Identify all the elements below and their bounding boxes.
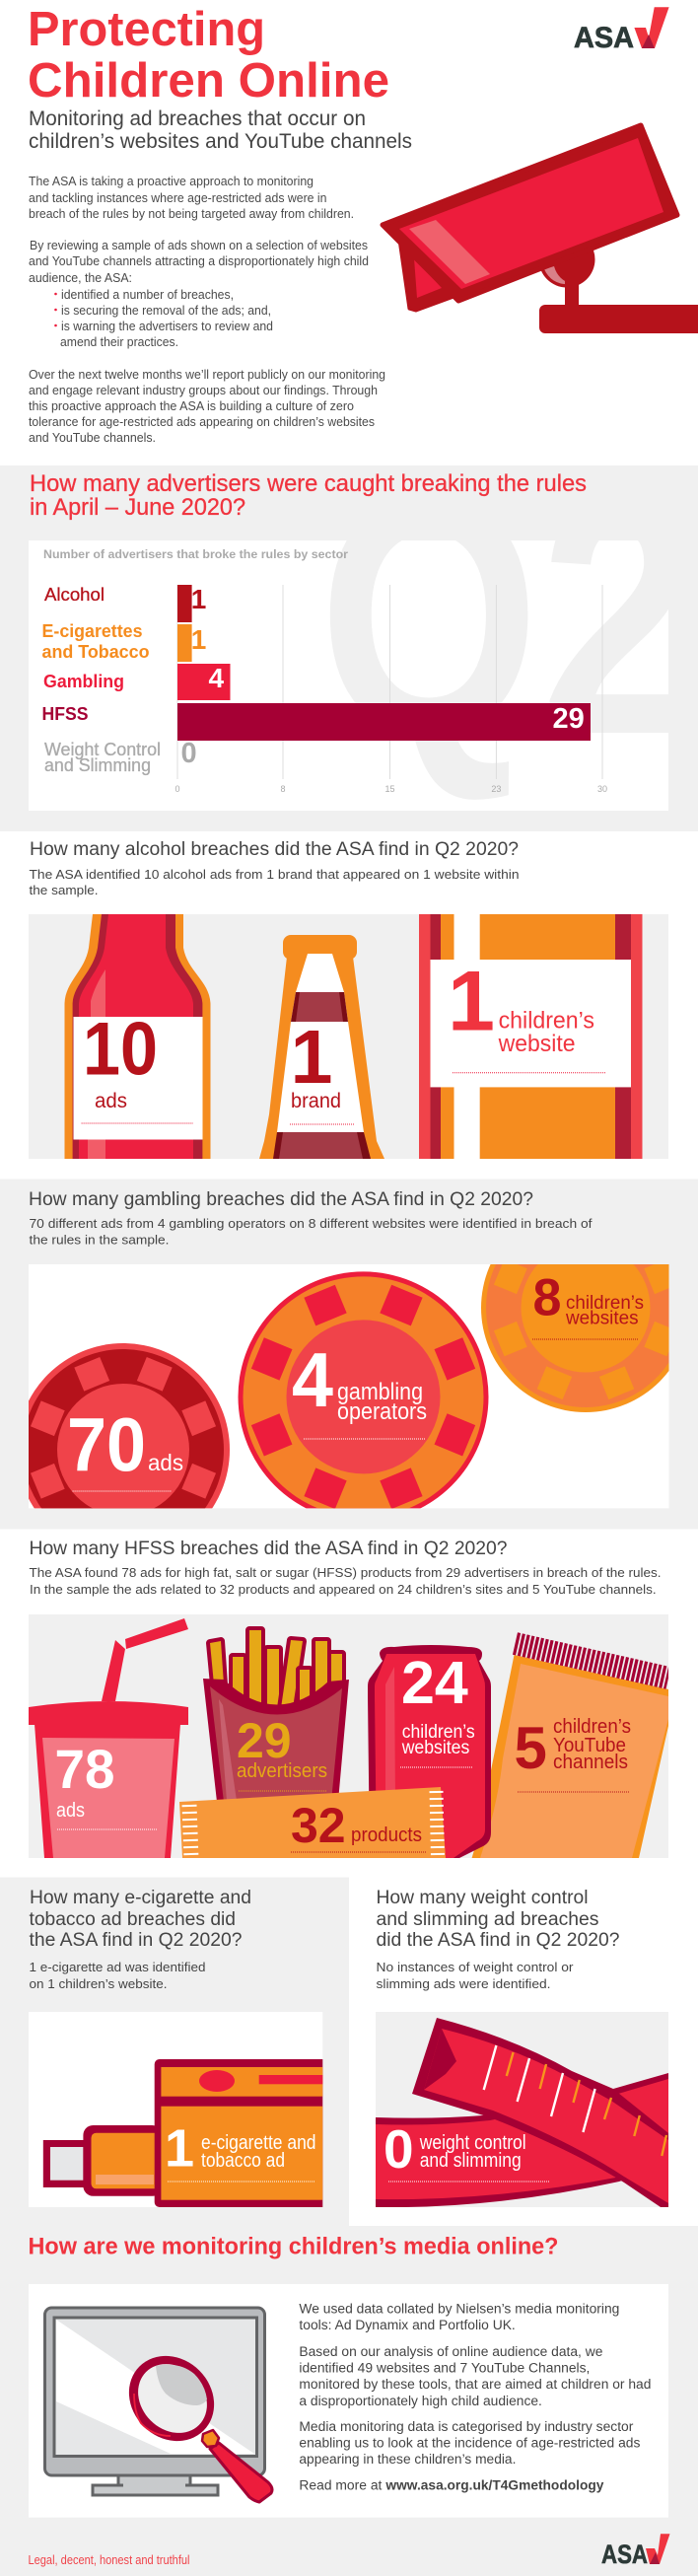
intro text: audience, the ASA: xyxy=(29,270,132,285)
heading: weight control: How many weight control xyxy=(377,1888,588,1908)
bar: gambling: 4 xyxy=(209,663,225,693)
text: methodology: appearing in these children’s media. xyxy=(299,2452,516,2467)
bar: HFSS: 29 xyxy=(552,703,585,735)
text: methodology: tools: Ad Dynamix and Portfolio UK. xyxy=(299,2318,516,2332)
bar: weight control and slimming: and Slimming xyxy=(44,755,151,775)
title: Protecting xyxy=(28,3,265,56)
text: methodology: Read more at xyxy=(299,2477,383,2492)
footer tagline: Legal, decent, honest and truthful xyxy=(28,2553,189,2567)
icon: bottle with 1 brand: brand xyxy=(291,1090,341,1112)
subtitle: Monitoring ad breaches that occur on xyxy=(29,107,366,130)
bar: gambling xyxy=(43,663,231,700)
text: methodology: enabling us to look at the incidence of age-restricted ads xyxy=(299,2436,641,2451)
text: gambling: the rules in the sample. xyxy=(30,1234,170,1248)
intro text: and YouTube channels attracting a disproportionately high child xyxy=(29,253,369,268)
title: Children Online xyxy=(28,54,389,107)
icon: crisp packet 5 YouTube channels xyxy=(472,1643,668,1858)
icon: chip 8 children's websites xyxy=(481,1264,668,1412)
icon panel: e-cigarette: 1 xyxy=(165,2119,194,2179)
icon: bottle with 10 ads: ads xyxy=(95,1090,127,1112)
intro text: By reviewing a sample of ads shown on a selection of websites xyxy=(30,238,368,252)
bar: e-cigarettes and tobacco xyxy=(41,621,206,662)
heading: monitoring: How are we monitoring children’s media online? xyxy=(28,2234,558,2260)
axis labels: 15 xyxy=(384,784,395,794)
icon: crisp packet 5 YouTube channels: children’s xyxy=(553,1716,631,1738)
icon: can 24 children's websites: 24 xyxy=(401,1649,468,1716)
icon: chip 8 children's websites: children’s xyxy=(566,1293,644,1314)
heading: in April – June 2020? xyxy=(30,494,245,521)
heading: e-cigarette: How many e-cigarette and xyxy=(30,1888,251,1908)
icon: drink cup 78 ads: 78 xyxy=(55,1738,114,1800)
bar: HFSS: HFSS xyxy=(41,704,89,724)
panel: monitoring content xyxy=(29,2284,668,2518)
icon: can 24 children's websites: websites xyxy=(401,1738,469,1758)
subtitle xyxy=(29,107,412,153)
icon panel: e-cigarette: e-cigarette and xyxy=(201,2132,315,2154)
axis labels: 8 xyxy=(280,784,286,794)
intro text: is securing the removal of the ads; and, xyxy=(61,303,271,318)
icon: fries 29 advertisers xyxy=(203,1630,349,1802)
text: HFSS xyxy=(30,1565,661,1597)
icon panel: tape measure: 0 xyxy=(384,2118,414,2180)
text: weight control: No instances of weight control or xyxy=(377,1960,574,1974)
text: alcohol: the sample. xyxy=(30,883,99,897)
intro text: tolerance for age-restricted ads appearing on children’s websites xyxy=(29,414,375,429)
title xyxy=(28,3,389,107)
axis labels: 0 xyxy=(174,784,180,794)
icon: snack bar 32 products: products xyxy=(351,1824,422,1846)
icon: snack bar 32 products: 32 xyxy=(291,1798,346,1853)
icon panel: tape measure: and slimming xyxy=(420,2150,522,2172)
icon panel: e-cigarette xyxy=(29,2012,352,2207)
icon: chip 4 gambling operators: gambling xyxy=(337,1379,423,1405)
icon: fries 29 advertisers: advertisers xyxy=(237,1759,327,1782)
intro text xyxy=(29,174,385,445)
icon panel: e-cigarette: tobacco ad xyxy=(201,2150,285,2172)
heading: weight control xyxy=(377,1888,619,1951)
icon: label on children's website pack: website xyxy=(498,1031,576,1057)
icon: chip 8 children's websites: 8 xyxy=(532,1268,562,1327)
icon: chip 70 ads xyxy=(29,1343,230,1509)
footer logo: ASA: ASA xyxy=(601,2540,648,2569)
panel: gambling section xyxy=(0,1180,698,1556)
intro text: Over the next twelve months we’ll report publicly on our monitoring xyxy=(29,367,385,382)
axis labels: 23 xyxy=(491,784,501,794)
icon: can 24 children's websites: children’s xyxy=(402,1722,475,1743)
text: HFSS: The ASA found 78 ads for high fat, salt or sugar (HFSS) products from 29 advertisers in breach of the rules. xyxy=(30,1565,661,1580)
intro text: and engage relevant industry groups about our findings. Through xyxy=(29,383,378,397)
bar: e-cigarettes and tobacco: E-cigarettes xyxy=(41,621,142,641)
icon: snack bar 32 products xyxy=(179,1787,446,1858)
panel: alcohol illustrations xyxy=(29,914,668,1159)
bar: weight control and slimming xyxy=(44,738,197,775)
panel: HFSS illustrations xyxy=(29,1614,668,1858)
intro text: breach of the rules by not being targeted away from children. xyxy=(29,206,354,221)
icon: chip 4 gambling operators: 4 xyxy=(292,1336,333,1423)
icon: crisp packet 5 YouTube channels: 5 xyxy=(515,1715,547,1781)
text: e-cigarette: on 1 children’s website. xyxy=(30,1976,168,1991)
text: methodology: Based on our analysis of online audience data, we xyxy=(299,2344,602,2359)
icon: chip 8 children's websites: websites xyxy=(565,1308,639,1328)
heading: HFSS: How many HFSS breaches did the ASA find in Q2 2020? xyxy=(30,1538,507,1559)
chart subtitle: Number of advertisers that broke the rules by sector xyxy=(43,549,349,561)
icon: drink cup 78 ads xyxy=(29,1618,188,1858)
bar: weight control and slimming: 0 xyxy=(181,738,197,769)
panel: gambling chips xyxy=(29,1264,668,1509)
text: weight control: slimming ads were identified. xyxy=(377,1976,550,1991)
text: methodology: a disproportionately high child audience. xyxy=(299,2394,542,2408)
axis labels: 30 xyxy=(597,784,607,794)
heading: e-cigarette xyxy=(30,1888,251,1951)
icon: crisp packet 5 YouTube channels: channels xyxy=(553,1752,628,1773)
text: e-cigarette: 1 e-cigarette ad was identified xyxy=(30,1960,205,1974)
panel: e-cigarette section xyxy=(0,1878,352,2227)
heading: e-cigarette: the ASA find in Q2 2020? xyxy=(30,1930,243,1951)
heading: weight control: did the ASA find in Q2 2020? xyxy=(377,1930,619,1951)
icon: label on children's website pack xyxy=(419,914,643,1159)
intro text: The ASA is taking a proactive approach to monitoring xyxy=(29,174,314,188)
icon: bottle with 1 brand xyxy=(259,935,384,1159)
bar: HFSS xyxy=(41,703,591,741)
icon: crisp packet 5 YouTube channels: YouTube xyxy=(553,1735,626,1756)
text: alcohol: The ASA identified 10 alcohol ads from 1 brand that appeared on 1 website within xyxy=(30,867,519,882)
text: methodology: www.asa.org.uk/T4Gmethodology xyxy=(384,2477,604,2492)
text: gambling xyxy=(30,1217,593,1248)
bar: e-cigarettes and tobacco: and Tobacco xyxy=(41,642,150,662)
icon: monitor with magnifying glass xyxy=(45,2308,272,2502)
panel: monitoring section xyxy=(0,2226,698,2576)
logo: ASA xyxy=(574,7,669,54)
text: HFSS: In the sample the ads related to 32 products and appeared on 24 children’s sites and 5 YouTube channels. xyxy=(30,1582,657,1597)
heading: e-cigarette: tobacco ad breaches did xyxy=(30,1909,236,1930)
icon: chip 4 gambling operators: operators xyxy=(337,1398,427,1425)
bar: alcohol xyxy=(44,584,206,622)
text: methodology: identified 49 websites and 7 YouTube Channels, xyxy=(299,2361,590,2376)
text: methodology xyxy=(299,2302,651,2492)
bar: gambling: Gambling xyxy=(43,672,124,691)
icon: bottle with 1 brand: 1 xyxy=(291,1015,332,1100)
intro text: this proactive approach the ASA is building a culture of zero xyxy=(29,398,354,413)
text: e-cigarette xyxy=(30,1960,205,1991)
icon: bottle with 10 ads: 10 xyxy=(83,1007,158,1091)
intro text: and tackling instances where age-restricted ads were in xyxy=(29,190,327,205)
bar chart panel xyxy=(29,540,668,811)
heading: weight control: and slimming ad breaches xyxy=(377,1909,599,1930)
icon: chip 70 ads: 70 xyxy=(67,1402,146,1487)
axis labels xyxy=(174,784,607,794)
logo: ASA: ASA xyxy=(574,22,634,54)
icon: chip 4 gambling operators xyxy=(239,1271,489,1522)
subtitle: children’s websites and YouTube channels xyxy=(29,129,412,153)
text: methodology: Media monitoring data is categorised by industry sector xyxy=(299,2419,634,2434)
footer logo: ASA xyxy=(601,2534,670,2569)
bar: weight control and slimming: Weight Control xyxy=(44,740,161,759)
bar: alcohol: 1 xyxy=(191,584,206,614)
icon: can 24 children's websites xyxy=(368,1645,491,1858)
icon: chip 70 ads: ads xyxy=(148,1450,183,1475)
bar: alcohol: Alcohol xyxy=(44,585,105,605)
intro text: is warning the advertisers to review and xyxy=(61,319,273,333)
text: gambling: 70 different ads from 4 gambling operators on 8 different websites were identified in breach of xyxy=(30,1217,593,1231)
heading: alcohol: How many alcohol breaches did the ASA find in Q2 2020? xyxy=(30,839,519,860)
heading: How many advertisers were caught breaking the rules xyxy=(30,470,587,497)
intro text: identified a number of breaches, xyxy=(61,287,234,302)
icon: label on children's website pack: children’s xyxy=(499,1007,594,1034)
text: methodology: monitored by these tools, that are aimed at children or had xyxy=(299,2377,651,2392)
icon: label on children's website pack: 1 xyxy=(448,955,495,1049)
icon: bottle with 10 ads xyxy=(65,914,211,1159)
text: methodology: We used data collated by Nielsen’s media monitoring xyxy=(299,2302,619,2317)
icon: drink cup 78 ads: ads xyxy=(56,1800,85,1822)
text: weight control xyxy=(377,1960,574,1991)
heading xyxy=(30,470,587,521)
intro text: and YouTube channels. xyxy=(29,430,156,445)
icon: security camera xyxy=(383,125,698,333)
heading: gambling: How many gambling breaches did the ASA find in Q2 2020? xyxy=(29,1189,533,1210)
bar: e-cigarettes and tobacco: 1 xyxy=(191,624,206,655)
intro text: amend their practices. xyxy=(60,334,178,349)
panel: advertisers by sector xyxy=(0,426,698,831)
text: alcohol xyxy=(30,867,519,897)
icon: fries 29 advertisers: 29 xyxy=(237,1713,292,1768)
icon panel: tape measure xyxy=(375,2012,668,2209)
icon panel: tape measure: weight control xyxy=(419,2132,526,2154)
